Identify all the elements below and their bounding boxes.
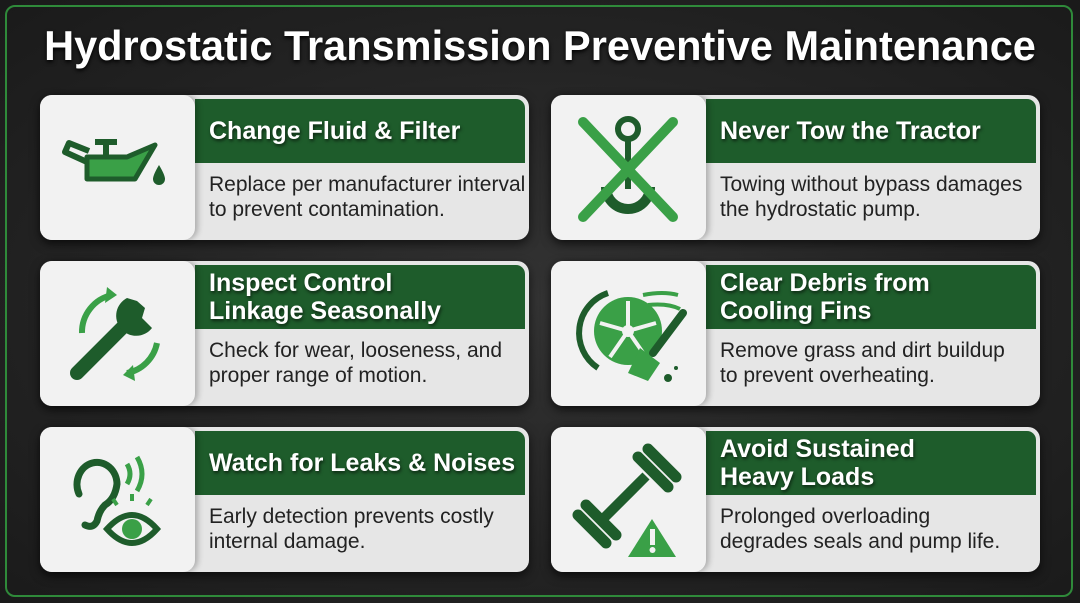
- panel: heavy loads: [551, 427, 1040, 572]
- text: Replace per manufacturer interval: [209, 173, 525, 196]
- header: Change Fluid & Filter: [209, 117, 460, 145]
- text: proper range of motion.: [209, 364, 427, 387]
- text: Check for wear, looseness, and: [209, 339, 502, 362]
- text: to prevent contamination.: [209, 198, 445, 221]
- icon: dumbbell warning: [551, 427, 706, 572]
- panel: clear debris: [551, 261, 1040, 406]
- text: internal damage.: [209, 530, 365, 553]
- text: the hydrostatic pump.: [720, 198, 921, 221]
- header: Linkage Seasonally: [209, 297, 441, 325]
- header: [195, 265, 525, 329]
- text: Early detection prevents costly: [209, 505, 494, 528]
- header: Clear Debris from: [720, 269, 930, 297]
- icon: oil can: [40, 95, 195, 240]
- header: Watch for Leaks & Noises: [209, 449, 515, 477]
- text: [209, 173, 525, 221]
- panel: change fluid: [40, 95, 529, 240]
- text: [209, 505, 494, 553]
- text: [720, 505, 1000, 553]
- header: Cooling Fins: [720, 297, 871, 325]
- icon: ear and eye: [40, 427, 195, 572]
- text: Prolonged overloading: [720, 505, 930, 528]
- header: [706, 265, 1036, 329]
- header: Never Tow the Tractor: [720, 117, 981, 145]
- header: [195, 431, 525, 495]
- panel: leaks and noises: [40, 427, 529, 572]
- header: Avoid Sustained: [720, 435, 915, 463]
- text: Towing without bypass damages: [720, 173, 1022, 196]
- icon: wrench: [40, 261, 195, 406]
- text: [720, 339, 1005, 387]
- title: Hydrostatic Transmission Preventive Maintenance: [44, 22, 1036, 69]
- text: [209, 339, 502, 387]
- header: Heavy Loads: [720, 463, 874, 491]
- panel: never tow: [551, 95, 1040, 240]
- text: Remove grass and dirt buildup: [720, 339, 1005, 362]
- header: [706, 99, 1036, 163]
- header: Inspect Control: [209, 269, 392, 297]
- header: [195, 99, 525, 163]
- icon: no towing: [551, 95, 706, 240]
- panel: inspect linkage: [40, 261, 529, 406]
- text: [720, 173, 1022, 221]
- header: [706, 431, 1036, 495]
- text: degrades seals and pump life.: [720, 530, 1000, 553]
- icon: fan and brush: [551, 261, 706, 406]
- text: to prevent overheating.: [720, 364, 935, 387]
